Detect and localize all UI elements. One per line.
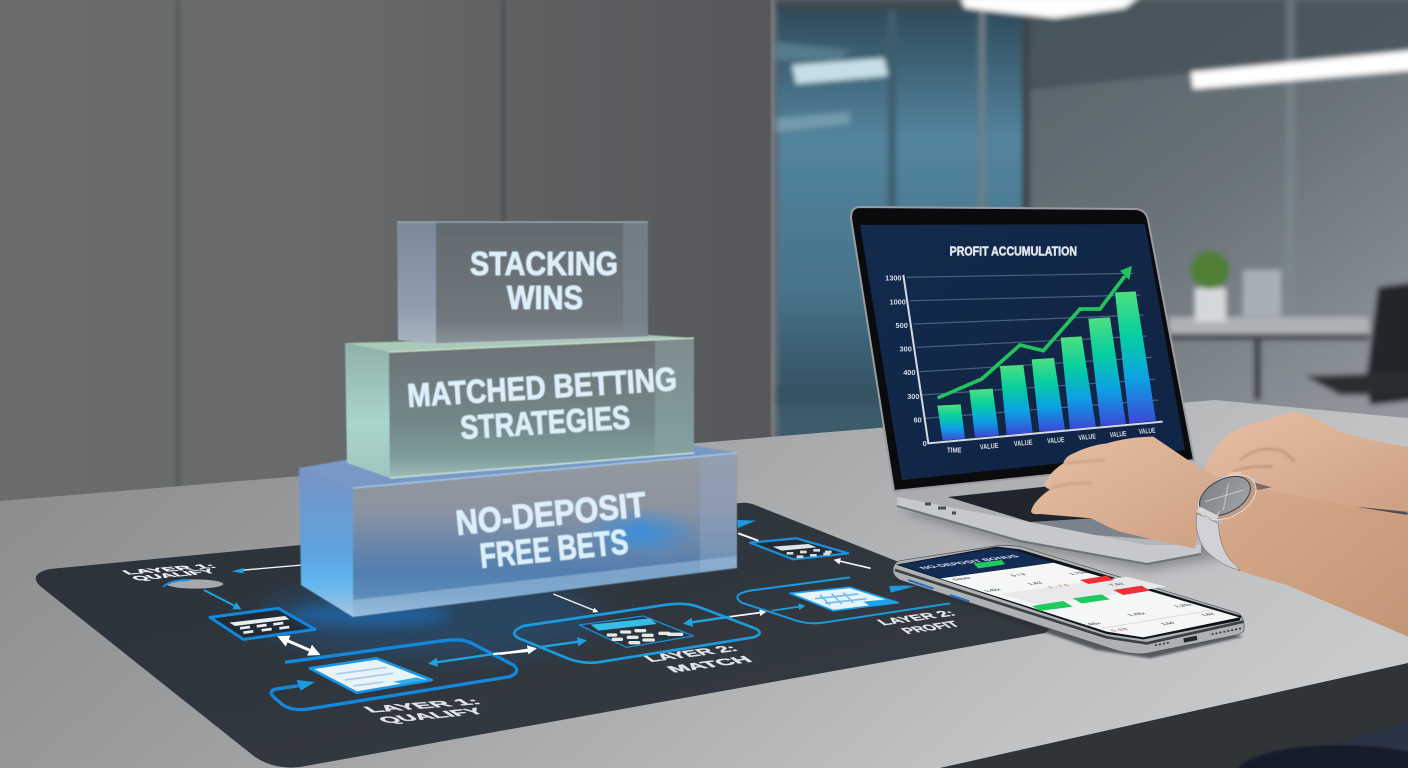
y axis labels: 1300 — [885, 273, 901, 282]
y axis labels: 400 — [903, 368, 915, 377]
label: Layer 2 Profit: PROFIT — [898, 619, 964, 636]
phone — [893, 545, 1244, 658]
x axis labels — [947, 426, 1156, 455]
label: Layer 1 Qualify (small): LAYER 1: — [119, 562, 220, 576]
phone odds rows: 1.62 — [1026, 581, 1046, 586]
watch face — [1193, 468, 1257, 524]
text: Stacking Wins: STACKING — [470, 245, 618, 282]
bars — [937, 291, 1156, 441]
y axis labels: 500 — [896, 321, 908, 330]
laptop base — [893, 458, 1280, 570]
glass block: No-Deposit Free Bets — [290, 445, 737, 627]
chart title: PROFIT ACCUMULATION — [950, 244, 1077, 258]
chevron: blue by phone — [889, 585, 920, 593]
background: blurred office with windows — [776, 0, 1408, 450]
y axis labels: 0 — [923, 439, 927, 448]
text: Matched Betting Strategies: STRATEGIES — [459, 398, 631, 446]
trend arrowhead — [1120, 266, 1132, 280]
x axis labels: TIME — [947, 446, 962, 455]
label: Layer 1 Qualify: QUALIFY — [374, 706, 489, 725]
label: Layer 2 Profit: LAYER 2: — [874, 608, 960, 627]
icon: coin disc — [163, 579, 223, 589]
text: No-Deposit Free Bets: FREE BETS — [478, 522, 630, 576]
icon: calculator large — [579, 616, 693, 647]
watch strap rear — [1252, 482, 1272, 490]
label: Layer 2 Profit — [874, 608, 964, 636]
arrow: qualify to calculator — [204, 590, 240, 609]
arrow: from block — [553, 594, 597, 612]
arrowhead: loop — [297, 680, 315, 691]
phone odds rows: 5/9 — [1009, 573, 1029, 578]
phone odds rows: 1.42x — [982, 588, 1004, 593]
phone odds rows: 1.20x — [1172, 603, 1196, 608]
arrow: into Layer 2 — [500, 649, 535, 654]
phone red odds tags — [1080, 576, 1150, 595]
label: Layer 2 Match: LAYER 2: — [641, 643, 742, 664]
right hand — [1205, 413, 1408, 512]
shadow beneath arm — [1273, 493, 1408, 517]
phone screen white — [940, 563, 1239, 637]
watch case — [1191, 466, 1263, 529]
watch lug — [1197, 507, 1220, 521]
label: Layer 1 Qualify (small): QUALIFY — [128, 568, 219, 582]
phone odds rows: 1.54 — [1159, 621, 1178, 626]
arrow: blue into calculator — [538, 641, 585, 647]
arrow: between loops blue — [685, 617, 730, 623]
arrow: block to far calculator — [738, 533, 758, 541]
phone odds rows: 1.70 — [1046, 584, 1072, 589]
text: No-Deposit Free Bets: NO-DEPOSIT — [454, 485, 648, 543]
phone buttons — [908, 580, 969, 601]
glass block: Stacking Wins — [397, 222, 648, 344]
label: Layer 2 Match: MATCH — [663, 654, 756, 675]
phone green odds tags — [1032, 594, 1110, 611]
phone shadow — [893, 570, 1243, 658]
phone header: NO-DEPOSIT BONUS — [917, 554, 1022, 570]
workflow left half: Layer 1 qualify — [119, 562, 530, 725]
phone odds rows: 1.62 — [1199, 612, 1218, 617]
icon: calculator — [210, 608, 315, 639]
phone body — [893, 545, 1244, 654]
icon: document — [310, 658, 432, 693]
phone odds rows: 5.88 — [1109, 628, 1131, 633]
gridlines — [907, 273, 1158, 418]
forearm — [1218, 487, 1408, 637]
phone bezel — [896, 547, 1242, 639]
laptop display — [860, 224, 1185, 480]
phone speaker grille and port — [1155, 628, 1241, 645]
phone odds rows: 7.62 — [1107, 582, 1127, 587]
chart: profit accumulation — [885, 244, 1163, 455]
laptop — [851, 207, 1280, 570]
phone odds rows: 1.88x — [1081, 622, 1104, 627]
x axis labels: VALUE — [1138, 426, 1156, 436]
arrow: top feed — [237, 565, 302, 571]
phone side edge — [895, 570, 1243, 643]
text: Matched Betting Strategies — [406, 360, 678, 446]
hands and watch — [1031, 413, 1408, 637]
left hand — [1031, 437, 1222, 548]
icon: calculator far — [750, 538, 848, 559]
phone odds rows: Score — [951, 576, 974, 582]
arrow: between loops white — [730, 612, 765, 617]
arrow: blue inbound — [430, 654, 493, 663]
watch strap — [1196, 513, 1240, 571]
phone odds rows — [951, 571, 1218, 633]
label: Layer 1 Qualify (small) — [119, 562, 220, 582]
loop: Layer 2 outline — [514, 604, 760, 663]
trend line — [938, 276, 1125, 398]
text: Matched Betting Strategies: MATCHED BETTING — [406, 360, 678, 414]
glass block: Matched Betting Strategies — [345, 335, 694, 478]
text: No-Deposit Free Bets — [454, 485, 648, 576]
y axis labels: 60 — [914, 416, 922, 425]
workflow right half: Layer 2 match and profit — [500, 520, 964, 675]
phone odds rows: 1.28x — [1126, 612, 1149, 617]
y axis labels — [885, 273, 927, 448]
x axis labels: VALUE — [1109, 429, 1127, 439]
table surface — [0, 400, 1408, 768]
arrow: match to document — [493, 651, 530, 654]
loop: Layer 3 outline — [737, 577, 950, 623]
label: Layer 1 Qualify: LAYER 1: — [359, 696, 485, 715]
x axis labels: VALUE — [979, 441, 999, 451]
phone header — [899, 548, 1053, 578]
mat with workflow diagram — [36, 503, 1049, 768]
x axis labels: VALUE — [1078, 432, 1096, 442]
chevron: blue top — [737, 520, 756, 528]
label: Layer 1 Qualify — [359, 696, 489, 725]
arrow: calculator to document — [286, 640, 318, 654]
axes — [903, 275, 1163, 443]
arrowhead: top feed — [232, 568, 244, 573]
arrow: phone to calculator — [835, 560, 871, 568]
text: Stacking Wins: WINS — [507, 279, 583, 316]
background: office wall panels — [0, 0, 776, 520]
y axis labels: 300 — [907, 392, 919, 401]
x axis labels: VALUE — [1013, 438, 1033, 448]
arrow: into document — [772, 606, 804, 611]
laptop screen bezel — [851, 207, 1194, 491]
text: Stacking Wins — [470, 245, 618, 316]
x axis labels: VALUE — [1047, 435, 1065, 445]
y axis labels: 1000 — [890, 297, 906, 306]
label: Layer 2 Match — [641, 643, 756, 675]
y axis labels: 300 — [900, 344, 912, 353]
phone odds rows: 1.75x — [1067, 571, 1091, 576]
icon: profit document — [790, 587, 898, 611]
loop outline — [271, 640, 517, 710]
